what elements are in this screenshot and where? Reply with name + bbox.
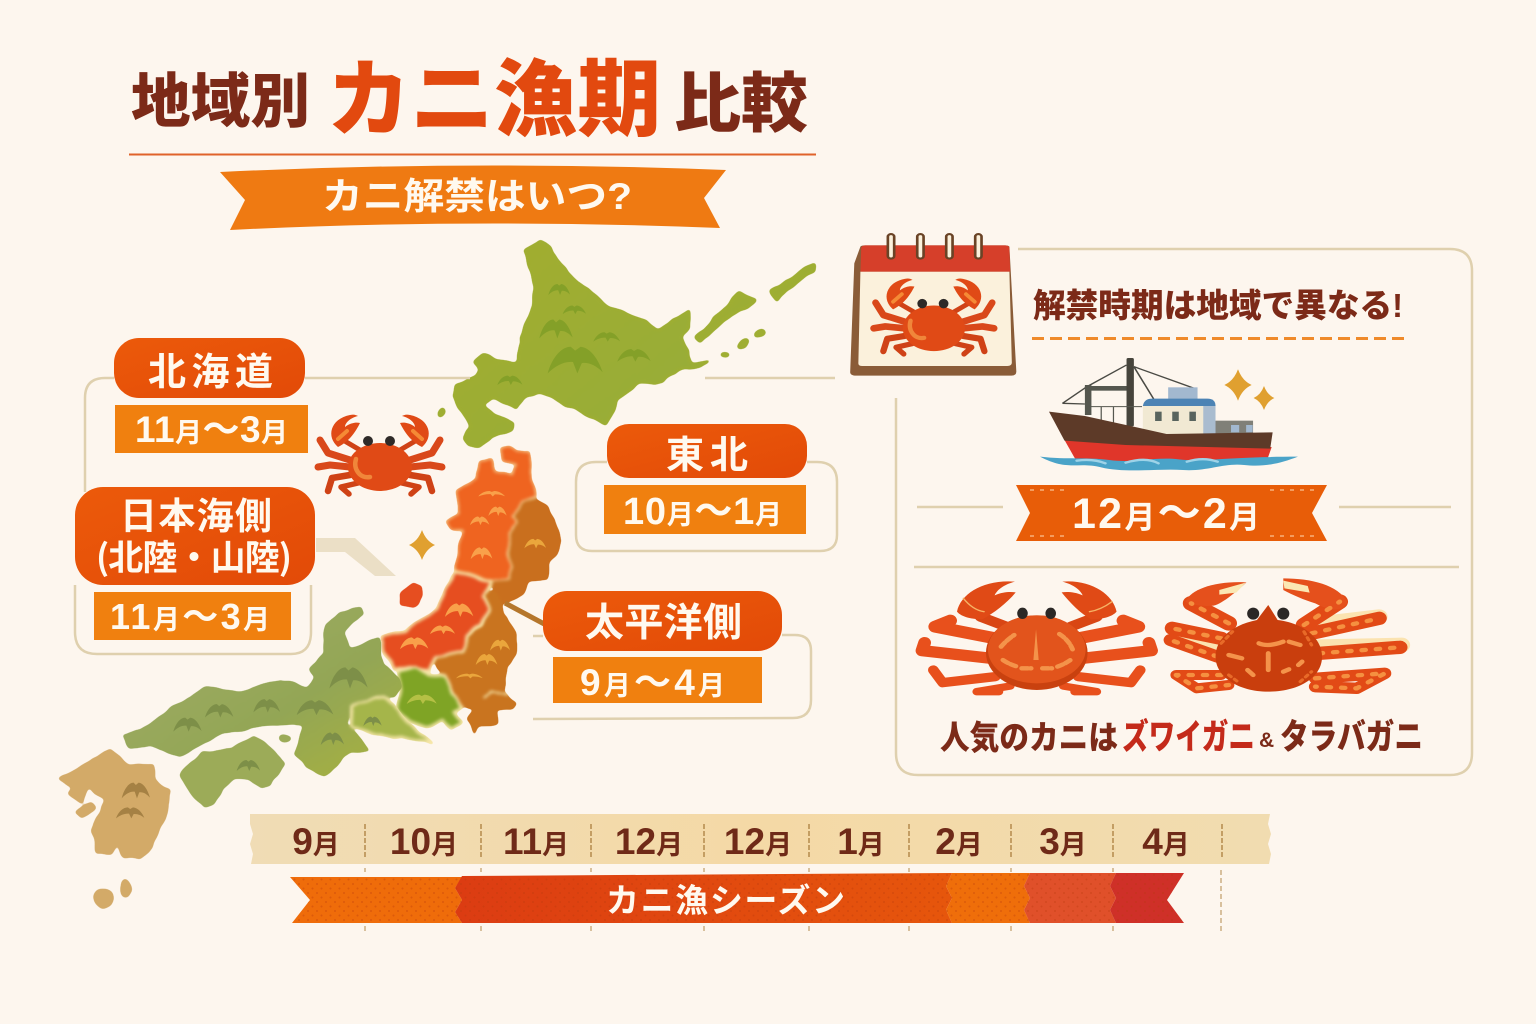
icon: sparkles by boat [1224, 369, 1274, 410]
panel: Tohoku [576, 424, 837, 551]
panel: Pacific side: 9月～4月 [580, 662, 725, 703]
caption: popular crabs [940, 717, 1423, 757]
title: 地域別 [131, 69, 310, 135]
region: Hokkaido and islands [435, 241, 815, 447]
panel: Sea of Japan side: 11月～3月 [110, 596, 270, 637]
timeline: months: 10月 [390, 821, 458, 862]
subtitle ribbon: カニ解禁はいつ? [322, 176, 632, 217]
season ribbon [290, 873, 1184, 923]
timeline: months: 12月 [724, 821, 792, 862]
caption: popular crabs: タラバガニ [1280, 718, 1423, 757]
panel: Pacific side: 太平洋側 [585, 602, 742, 645]
icon: sparkle on map [409, 530, 435, 560]
panel: Hokkaido [85, 338, 835, 492]
crab illustration on map [318, 415, 442, 494]
icon: calendar with crab [850, 237, 1016, 376]
connector: Sea of Japan side [316, 538, 396, 576]
panel: Hokkaido: 11月～3月 [135, 409, 288, 450]
panel: Pacific side [505, 591, 811, 719]
caption: popular crabs: & [1259, 729, 1274, 752]
title: カニ漁期 [327, 53, 661, 147]
subtitle ribbon [220, 165, 726, 230]
season ribbon: カニ漁シーズン [606, 882, 845, 919]
timeline: months: 12月 [615, 821, 683, 862]
illustration: snow crab [922, 581, 1152, 692]
icon: fishing boat [1040, 358, 1298, 470]
ribbon: main season: 12月～2月 [1072, 490, 1260, 538]
timeline: months [250, 814, 1271, 933]
timeline: months: 2月 [935, 821, 983, 862]
panel: Sea of Japan side: 日本海側 [120, 496, 272, 537]
map of Japan [58, 241, 815, 909]
panel: Hokkaido: 北海道 [148, 352, 273, 394]
title: 比較 [674, 67, 808, 140]
panel: Tohoku: 10月～1月 [623, 491, 782, 533]
title [129, 53, 816, 154]
caption: popular crabs: ズワイガニ [1122, 717, 1255, 757]
panel: Tohoku: 東北 [666, 435, 748, 477]
panel: Sea of Japan side [75, 487, 315, 654]
panel: Sea of Japan side: (北陸・山陸) [96, 530, 292, 581]
ribbon: main season [1016, 485, 1327, 541]
region: Honshu north, centre and east [382, 447, 562, 737]
region: western Honshu, Shikoku, Kyushu [58, 605, 432, 909]
illustration: king crab [1170, 578, 1402, 692]
timeline: months: 9月 [292, 821, 340, 862]
caption: popular crabs: 人気のカニは [940, 719, 1118, 756]
timeline: months: 3月 [1039, 821, 1087, 862]
heading: right panel: 解禁時期は地域で異なる! [1033, 287, 1403, 324]
timeline: months: 4月 [1142, 821, 1190, 862]
timeline: months: 1月 [837, 821, 885, 862]
panel: right info box [850, 237, 1472, 775]
timeline: months: 11月 [503, 821, 569, 862]
